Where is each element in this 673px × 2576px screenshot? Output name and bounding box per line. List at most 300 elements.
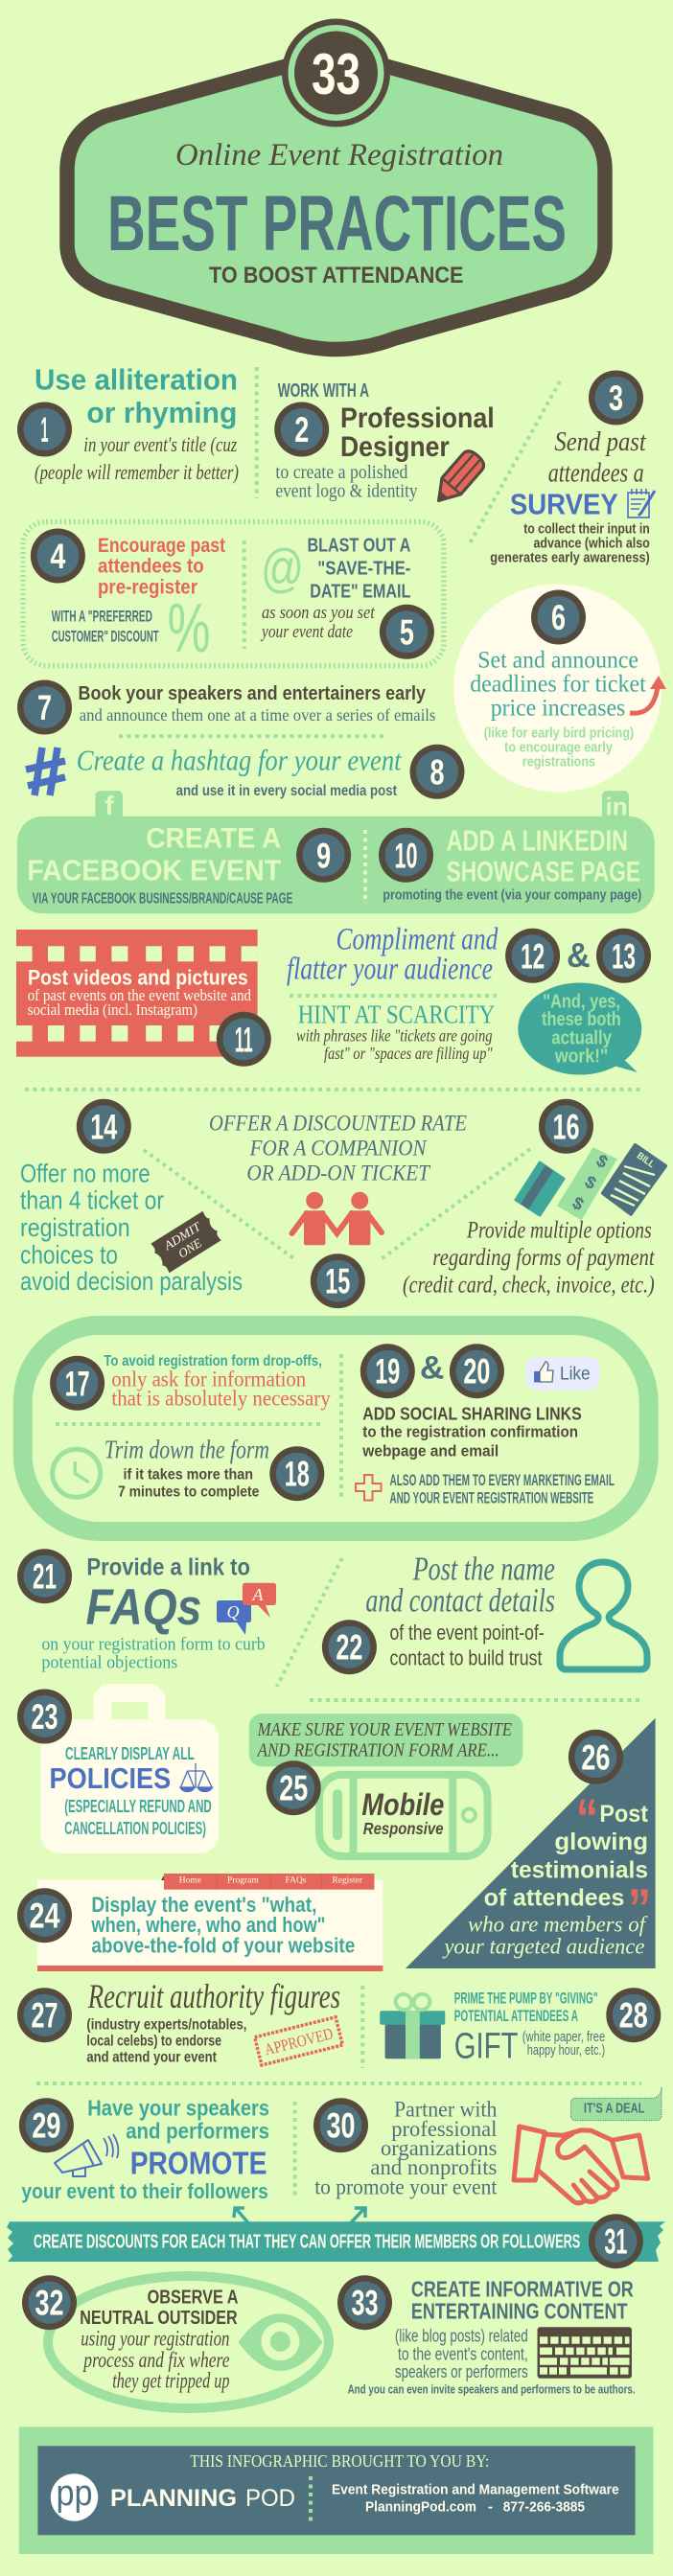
tip 22 note: of the event point-of- [389, 1621, 545, 1644]
tip 3 script: Send past [554, 426, 647, 457]
tip 6 note: (like for early bird pricing) [484, 724, 634, 741]
badge 25 [267, 1760, 321, 1815]
tip 4 note [52, 608, 159, 645]
tip 14 text: registration [20, 1213, 130, 1242]
tip 28 note: happy hour, etc.) [527, 2043, 605, 2058]
tip 32 note: process and fix where [82, 2348, 230, 2372]
badge 14: 14 [90, 1107, 118, 1146]
tip 15 heading: OR ADD-ON TICKET [246, 1162, 431, 1185]
badge 27 [17, 1988, 72, 2042]
tip 33 note: (like blog posts) related [395, 2326, 528, 2345]
badge 16: 16 [552, 1107, 579, 1146]
badge 17 [50, 1356, 104, 1411]
badge 1 [17, 402, 72, 456]
tip 25 text: Mobile [361, 1787, 444, 1822]
planning pod logo: PLANNING [110, 2485, 237, 2512]
tip 26 heading: of attendees [484, 1884, 624, 1911]
badge 30 [313, 2098, 368, 2152]
badge 7 [17, 680, 72, 734]
badge 14 [77, 1099, 131, 1154]
speech bubble: these both [542, 1009, 621, 1030]
icon: dollar bills: $ [582, 1172, 599, 1193]
tip 21 [17, 1549, 276, 1673]
tip 14 text: than 4 ticket or [20, 1186, 164, 1215]
tip 9 heading: FACEBOOK EVENT [27, 853, 281, 886]
tip 1 note: (people will remember it better) [35, 460, 239, 484]
icon: Q and A bubbles: Q [226, 1602, 240, 1622]
badge 23 [17, 1689, 72, 1744]
tip 29 note: your event to their followers [21, 2179, 268, 2203]
icon: hashtag [26, 748, 65, 795]
tip 24 text: when, where, who and how" [91, 1913, 325, 1937]
footer [19, 2426, 653, 2554]
tab: facebook [95, 791, 123, 829]
tip 26 heading: glowing [554, 1828, 648, 1855]
tip 1 [17, 363, 239, 484]
badge 21: 21 [33, 1557, 57, 1597]
tip 30 [313, 2087, 661, 2203]
badge 5 [380, 605, 434, 659]
badge 10 [379, 828, 433, 883]
badge 28: 28 [619, 1996, 648, 2036]
tip 31 [7, 2208, 665, 2268]
badge 32: 32 [35, 2284, 63, 2323]
tip 22 note: contact to build trust [389, 1645, 542, 1669]
tip 14 [20, 1099, 243, 1296]
tip 33 [337, 2275, 636, 2397]
tip 30 text: professional [391, 2117, 497, 2141]
tip 6 heading: price increases [491, 696, 625, 722]
tip 6 heading: Set and announce [477, 648, 638, 674]
tip 33 heading [411, 2277, 634, 2323]
brush banner [7, 2221, 665, 2262]
tip 3 script: attendees a [548, 457, 644, 488]
badge 4 [31, 529, 85, 583]
icon: phone [319, 1775, 488, 1856]
tip 29 heading [87, 2096, 269, 2144]
tip 26 heading [484, 1801, 649, 1911]
icon: megaphone [55, 2134, 118, 2176]
tip 25 [249, 1714, 522, 1856]
tip 32 heading [80, 2286, 239, 2329]
badge 31: 31 [604, 2222, 627, 2262]
badge 2: 2 [294, 410, 309, 449]
tip 21 note: on your registration form to curb [41, 1636, 266, 1655]
tip 26 note [442, 1913, 649, 1958]
tip 13 note [296, 1026, 493, 1063]
icon: opening quote: “ [576, 1787, 598, 1848]
badge 22 [322, 1620, 377, 1674]
tip 21 heading: Provide a link to [86, 1553, 250, 1580]
tip 25 text: Responsive [363, 1819, 444, 1838]
tip 28 heading: POTENTIAL ATTENDEES A [454, 2008, 578, 2025]
tip 2 heading: Designer [340, 431, 450, 463]
tip 2 kicker: WORK WITH A [278, 380, 369, 402]
tip 25 speech box: MAKE SURE YOUR EVENT WEBSITE [257, 1719, 512, 1740]
tip 29 heading: and performers [126, 2119, 269, 2144]
badge 13: 13 [612, 936, 636, 976]
tip 1 heading [35, 363, 238, 429]
tab: linkedin [602, 791, 629, 829]
tip 24 text [91, 1893, 355, 1957]
tip 5 note: your event date [260, 622, 353, 642]
icon: at sign: @ [261, 538, 304, 598]
tips 19-20 note [361, 1422, 578, 1460]
icon: person outline [560, 1562, 647, 1669]
contact details: 877-266-3885 [503, 2499, 585, 2516]
tip 23 heading: POLICIES [50, 1761, 171, 1795]
tip 2 heading: Professional [340, 402, 495, 434]
contact details: - [488, 2499, 493, 2516]
tip 27 note: and attend your event [86, 2050, 218, 2066]
tip 15 heading: OFFER A DISCOUNTED RATE [209, 1111, 467, 1135]
badge 7: 7 [37, 688, 52, 727]
tip 30 text: Partner with [394, 2097, 498, 2121]
tip 26 heading: testimonials [511, 1856, 648, 1883]
tip 24 [17, 1874, 383, 1971]
badge 5: 5 [400, 612, 414, 652]
tip 27 [17, 1977, 342, 2066]
icon: handshake [514, 2127, 648, 2203]
tip 1 note [35, 432, 239, 484]
tip 8 heading: Create a hashtag for your event [77, 743, 403, 776]
tip 2 note: to create a polished [275, 462, 407, 483]
tips 19-20 addition [389, 1471, 615, 1506]
badge 25: 25 [279, 1769, 308, 1808]
tip 21 note [41, 1636, 266, 1673]
badge 11 [217, 1012, 271, 1067]
tip 8 [26, 743, 464, 799]
tips 19-20 note: to the registration confirmation [362, 1422, 578, 1440]
tip 26 [406, 1718, 656, 1968]
tip 32 note: using your registration [81, 2327, 230, 2351]
tip 16 [403, 1099, 665, 1298]
ampersand: & [420, 1349, 444, 1386]
badge 3: 3 [609, 379, 623, 418]
planning pod logo: pp [56, 2473, 92, 2514]
header badge [67, 19, 605, 349]
icon: credit card [516, 1162, 564, 1215]
badge 27: 27 [31, 1996, 58, 2036]
tip 14 text [20, 1159, 243, 1296]
tip 29 [19, 2096, 269, 2203]
tip 4 note: CUSTOMER" DISCOUNT [52, 627, 159, 645]
badge 23: 23 [31, 1697, 58, 1736]
icon: like button: Like [560, 1364, 591, 1384]
panel: tips 4 and 5 [23, 521, 444, 667]
survey word: SURVEY [510, 488, 618, 521]
badge 21 [17, 1549, 72, 1603]
icon: iris [238, 2313, 323, 2371]
tip 15 [209, 1111, 467, 1308]
ampersand: & [567, 935, 591, 975]
tip 23 kicker: CLEARLY DISPLAY ALL [65, 1743, 195, 1763]
badge 26: 26 [581, 1737, 610, 1777]
tip 16 text [403, 1218, 656, 1298]
tip 5 note [260, 603, 375, 642]
tip 25 text [361, 1787, 444, 1838]
tip 5 heading [307, 535, 410, 602]
website mockup: FAQs [286, 1875, 307, 1885]
tip 26 note: who are members of [468, 1913, 649, 1937]
tip 22 heading: Post the name [412, 1550, 555, 1587]
tips 19-20 note: webpage and email [361, 1441, 499, 1460]
badge 33: 33 [351, 2284, 378, 2323]
tip 4 heading: attendees to [98, 555, 204, 577]
website mockup: Home [179, 1875, 201, 1885]
badge 18: 18 [285, 1455, 310, 1494]
tip 11 note [28, 986, 252, 1019]
tip 2 note [275, 462, 418, 501]
tip 5 heading: "SAVE-THE- [317, 558, 410, 579]
badge 17: 17 [65, 1364, 90, 1403]
tip 11 heading: Post videos and pictures [28, 966, 248, 990]
badge 9: 9 [316, 836, 331, 875]
badge 6: 6 [551, 598, 566, 637]
tip 21 heading [86, 1553, 250, 1636]
tip 1 heading: or rhyming [86, 396, 237, 429]
tip 6 heading [470, 648, 646, 722]
website mockup: Register [332, 1875, 363, 1885]
badge 15 [311, 1254, 365, 1308]
badge 24: 24 [29, 1897, 60, 1936]
promote word: PROMOTE [130, 2145, 267, 2180]
speech bubble: work!" [554, 1046, 608, 1067]
badge 8 [410, 745, 464, 799]
icon: dollar bills [557, 1147, 617, 1220]
icon: scales [180, 1763, 213, 1792]
tip 5 heading: BLAST OUT A [307, 535, 410, 556]
tip 12 heading: Compliment and [336, 923, 499, 957]
icon: admit one ticket: ONE [175, 1235, 204, 1261]
badge 26 [569, 1730, 623, 1784]
tip 3 script [548, 426, 647, 488]
icon: Q and A bubbles: A [251, 1585, 265, 1604]
icon: survey notepad [628, 489, 655, 518]
badge 12: 12 [521, 936, 545, 976]
icon: admit one ticket: ADMIT [160, 1219, 203, 1254]
tip 24 text: above-the-fold of your website [91, 1933, 355, 1957]
tip 23 note: (ESPECIALLY REFUND AND [64, 1796, 212, 1816]
tip 28 note: (white paper, free [522, 2030, 605, 2045]
badge 3 [589, 370, 643, 426]
hexagon panel [67, 52, 605, 349]
tip 3 note: advance (which also [533, 536, 650, 552]
tip 12 heading [287, 923, 499, 987]
tip 22 [322, 1550, 647, 1674]
tip 2 heading [340, 402, 495, 463]
number medallion 33: 33 [312, 42, 360, 106]
tip 3 [490, 370, 655, 566]
tip 11 note: social media (incl. Instagram) [28, 1000, 197, 1019]
deal tag: IT'S A DEAL [584, 2100, 644, 2116]
icon: keyboard [537, 2327, 632, 2379]
tip 32 heading: NEUTRAL OUTSIDER [80, 2307, 238, 2329]
tab: facebook: f [104, 791, 114, 820]
tip 3 note: generates early awareness) [490, 550, 650, 566]
tip 17 text: To avoid registration form drop-offs, [104, 1353, 322, 1369]
deal tag [570, 2087, 661, 2121]
title script line: Online Event Registration [175, 138, 503, 172]
icon: approved stamp [255, 2017, 342, 2065]
tip 14 text: Offer no more [20, 1159, 151, 1187]
icon: film strip [16, 930, 258, 1057]
panel: tips 9 and 10 [17, 791, 655, 913]
tip 32 heading: OBSERVE A [148, 2286, 239, 2308]
tip 5 note: as soon as you set [262, 603, 375, 623]
tip 22 note [389, 1621, 545, 1669]
tip 4 heading: pre-register [98, 576, 197, 598]
icon: plus outline [356, 1475, 382, 1501]
tip 33 note [395, 2326, 528, 2381]
tip 25 speech box [249, 1714, 522, 1766]
tip 24 text: Display the event's "what, [91, 1893, 316, 1917]
badge 6 [531, 590, 586, 644]
tip 25 speech box: AND REGISTRATION FORM ARE... [256, 1740, 499, 1761]
badge 9 [296, 828, 351, 883]
badge 29: 29 [32, 2106, 60, 2146]
tip 30 text: and nonprofits [370, 2155, 497, 2179]
speech bubble: actually [551, 1027, 613, 1048]
tip 7 heading: Book your speakers and entertainers early [79, 683, 427, 704]
tip 26 heading: Post [599, 1801, 649, 1828]
badge 13 [596, 929, 651, 983]
icon: Q and A bubbles [217, 1583, 276, 1635]
tip 23 [17, 1684, 219, 1853]
tip 11 note: of past events on the event website and [28, 986, 252, 1004]
icon: dollar bills: $ [593, 1151, 611, 1172]
number medallion 33 [282, 19, 390, 126]
tip 15 heading [209, 1111, 467, 1185]
tip 30 text: organizations [381, 2136, 497, 2160]
tip 9 heading: CREATE A [146, 822, 281, 854]
speech bubble [518, 983, 641, 1075]
tip 14 text: choices to [20, 1240, 118, 1269]
tip 27 heading: Recruit authority figures [87, 1977, 340, 2015]
website mockup: Program [227, 1875, 259, 1885]
tip 6 heading: deadlines for ticket [470, 672, 646, 698]
tip 28 [380, 1988, 661, 2066]
icon: like button [525, 1357, 599, 1391]
tip 22 heading [365, 1550, 555, 1620]
tips 19-20 heading: ADD SOCIAL SHARING LINKS [362, 1404, 582, 1424]
footer heading: THIS INFOGRAPHIC BROUGHT TO YOU BY: [190, 2451, 489, 2471]
icon: percent sign: % [168, 590, 210, 667]
tip 6 note [484, 724, 634, 770]
tip 2 note: event logo & identity [275, 480, 418, 501]
tip 15 heading: FOR A COMPANION [249, 1137, 428, 1161]
tip 3 note [490, 521, 650, 566]
tip 17 text [104, 1353, 331, 1411]
tip 4 heading: Encourage past [98, 535, 225, 557]
icon: admit one ticket [150, 1210, 222, 1274]
icon: bill: BILL [635, 1151, 657, 1170]
badge 20: 20 [463, 1352, 490, 1392]
tip 33 note: to the event's content, [398, 2344, 528, 2363]
icon: dollar bills: $ [569, 1193, 587, 1214]
policy clipboard panel [40, 1684, 219, 1853]
badge 18 [269, 1446, 324, 1501]
tip 5 heading: DATE" EMAIL [310, 581, 410, 602]
tip 17 text: only ask for information [111, 1368, 307, 1392]
badge 19: 19 [375, 1352, 400, 1392]
badge 22: 22 [336, 1628, 362, 1668]
icon: clock [53, 1449, 101, 1497]
tip 28 note [522, 2030, 605, 2058]
tip 17 text: that is absolutely necessary [111, 1387, 331, 1411]
icon: eye outline [48, 2276, 329, 2408]
contact details [332, 2482, 619, 2516]
tip 12 heading: flatter your audience [287, 953, 493, 987]
badge 31 [589, 2214, 643, 2268]
tip 32 [22, 2275, 329, 2408]
badge 2 [274, 402, 329, 456]
icon: pencil [429, 448, 487, 509]
panel: tip 6 [453, 585, 666, 792]
tip 9 heading [27, 822, 281, 886]
tip 1 note: in your event's title (cuz [83, 432, 238, 456]
tip 30 text: to promote your event [314, 2174, 498, 2198]
tip 10 heading [447, 823, 640, 887]
tip 30 text [314, 2097, 498, 2198]
gift word: GIFT [454, 2026, 518, 2066]
badge 33 [337, 2275, 392, 2330]
badge 8: 8 [429, 752, 445, 792]
tip 2 [274, 380, 495, 509]
planning pod logo: POD [245, 2485, 295, 2512]
subtitle: TO BOOST ATTENDANCE [209, 263, 464, 288]
tip 13 heading: HINT AT SCARCITY [298, 1000, 495, 1028]
tip 13 note: with phrases like "tickets are going [296, 1026, 493, 1046]
tip 21 note: potential objections [41, 1654, 177, 1673]
tip 4 heading [98, 535, 225, 598]
tip 18 note: if it takes more than [123, 1466, 253, 1483]
badge 10: 10 [395, 836, 418, 875]
tip 8 note: and use it in every social media post [176, 783, 398, 799]
badge 30: 30 [326, 2106, 355, 2146]
icon: rising arrow [630, 676, 666, 713]
arrow to tip 30 [348, 2208, 365, 2226]
icon: two people holding hands [291, 1192, 382, 1245]
badge 4: 4 [50, 537, 66, 576]
contact details: PlanningPod.com [365, 2499, 476, 2516]
tip 6 note: to encourage early [504, 739, 613, 755]
website mockup [37, 1874, 383, 1971]
tip 7 note: and announce them one at a time over a series of emails [80, 705, 436, 724]
tip 13 note: fast" or "spaces are filling up" [324, 1044, 493, 1063]
triangle panel [406, 1718, 656, 1968]
icon: approved stamp: APPROVED [263, 2024, 335, 2058]
badge 24 [17, 1888, 72, 1943]
tip 14 text: avoid decision paralysis [20, 1267, 243, 1296]
tip 22 heading: and contact details [365, 1582, 555, 1620]
tip 4 note: WITH A "PREFERRED [52, 608, 152, 626]
speech bubble: "And, yes, [543, 992, 620, 1013]
tip 18 note [118, 1466, 259, 1501]
tip 1 heading: Use alliteration [35, 363, 238, 397]
badge 29 [19, 2098, 74, 2152]
tip 18 note: 7 minutes to complete [118, 1484, 259, 1501]
icon: closing quote: ” [628, 1877, 651, 1938]
badge 32 [22, 2275, 77, 2330]
badge 28 [606, 1988, 661, 2042]
tip 26 note: your targeted audience [442, 1934, 644, 1958]
badge 15: 15 [325, 1262, 350, 1301]
tip 6 note: registrations [522, 753, 595, 770]
badge 11: 11 [235, 1020, 253, 1059]
tip 28 heading [454, 1990, 598, 2025]
icon: gift box [380, 1991, 445, 2058]
